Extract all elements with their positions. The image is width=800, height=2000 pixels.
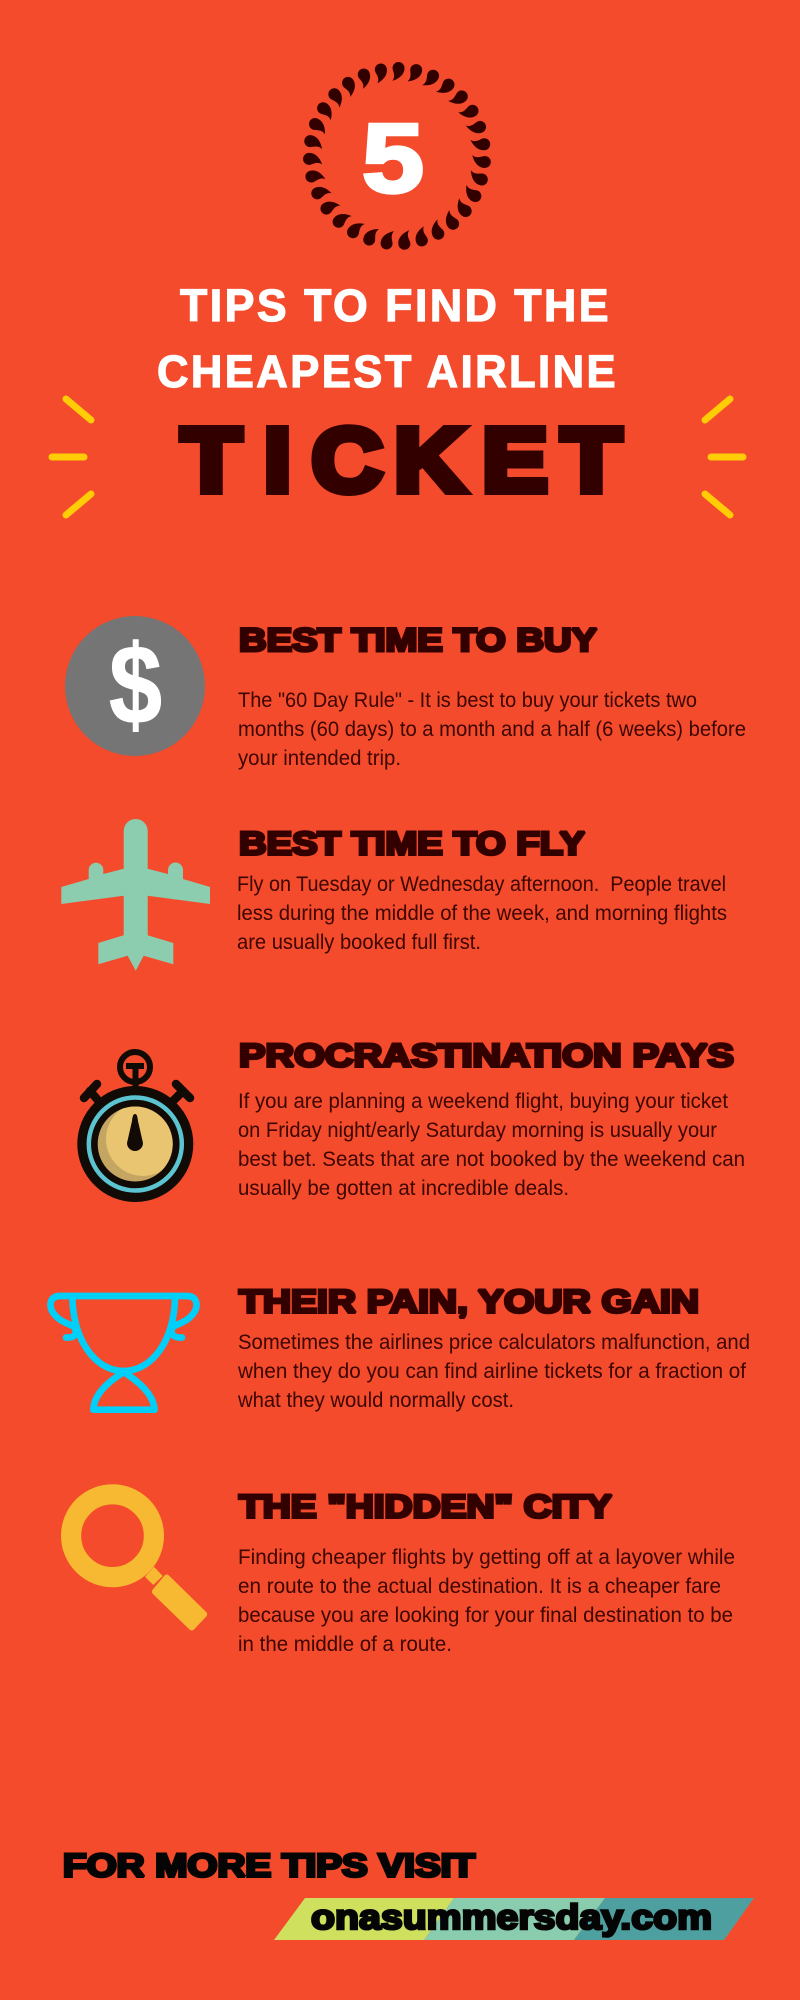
text block: their pain, your gain: Sometimes the airlines price calculators malfunction, and (238, 1330, 750, 1354)
icon: airplane (61, 819, 210, 971)
panel: the hidden city (238, 1488, 735, 1656)
text block: best time to buy (238, 688, 746, 770)
title: tips to find the cheapest airline: CHEAPEST AIRLINE (157, 346, 618, 397)
decoration: right yellow sparks (705, 399, 743, 515)
icon: trophy outline (51, 1296, 196, 1410)
text block: best time to fly (237, 872, 727, 954)
text block: best time to fly: are usually booked full first. (237, 930, 481, 954)
heading: procrastination pays: PROCRASTINATION PAYS (239, 1038, 734, 1074)
footer: website banner: onasummersday.com (311, 1898, 712, 1937)
text block: best time to fly: Fly on Tuesday or Wednesday afternoon. People travel (237, 872, 726, 896)
heading: the hidden city: THE "HIDDEN" CITY (239, 1488, 612, 1524)
icon: stopwatch (77, 1052, 193, 1202)
title: tips to find the cheapest airline (157, 280, 618, 397)
panel: their pain, your gain (237, 1284, 750, 1412)
text block: best time to buy: months (60 days) to a month and a half (6 weeks) before (238, 717, 746, 741)
text block: their pain, your gain (237, 1330, 750, 1412)
text block: the hidden city: Finding cheaper flights by getting off at a layover while (238, 1545, 735, 1569)
icon: dollar coin (65, 616, 205, 756)
text block: their pain, your gain: when they do you can find airline tickets for a fraction of (237, 1359, 746, 1383)
text block: procrastination pays: on Friday night/early Saturday morning is usually your (238, 1118, 717, 1142)
icon: magnifying glass (71, 1494, 204, 1628)
title: tips to find the cheapest airline: TIPS TO FIND THE (180, 280, 611, 331)
text block: the hidden city: in the middle of a route. (238, 1632, 452, 1656)
text block: procrastination pays: usually be gotten at incredible deals. (238, 1176, 569, 1200)
footer: website banner (274, 1898, 754, 1940)
text block: the hidden city: en route to the actual destination. It is a cheaper fare (238, 1574, 721, 1598)
text block: their pain, your gain: what they would normally cost. (237, 1388, 514, 1412)
heading: best time to buy: BEST TIME TO BUY (239, 622, 597, 658)
badge: teardrop ring with number 5: 5 (362, 103, 424, 213)
panel: best time to fly (237, 826, 727, 954)
text block: the hidden city (238, 1545, 735, 1656)
panel: best time to buy (238, 622, 746, 770)
text block: best time to fly: less during the middle of the week, and morning flights (237, 901, 727, 925)
heading: their pain, your gain: THEIR PAIN, YOUR GAIN (239, 1284, 699, 1320)
text block: best time to buy: your intended trip. (238, 746, 401, 770)
title: ticket: TICKET (181, 410, 621, 510)
icon: dollar coin: $ (109, 622, 162, 747)
decoration: left yellow sparks (52, 399, 91, 515)
panel: procrastination pays (238, 1038, 745, 1200)
text block: procrastination pays: best bet. Seats that are not booked by the weekend can (238, 1147, 745, 1171)
badge: teardrop ring with number 5 (303, 62, 491, 250)
text block: procrastination pays: If you are planning a weekend flight, buying your ticket (238, 1089, 728, 1113)
text block: procrastination pays (238, 1089, 745, 1200)
heading: best time to fly: BEST TIME TO FLY (239, 826, 585, 862)
text block: best time to buy: The "60 Day Rule" - It is best to buy your tickets two (238, 688, 697, 712)
text block: the hidden city: because you are looking for your final destination to be (238, 1603, 733, 1627)
footer: for more tips visit: FOR MORE TIPS VISIT (63, 1848, 476, 1884)
